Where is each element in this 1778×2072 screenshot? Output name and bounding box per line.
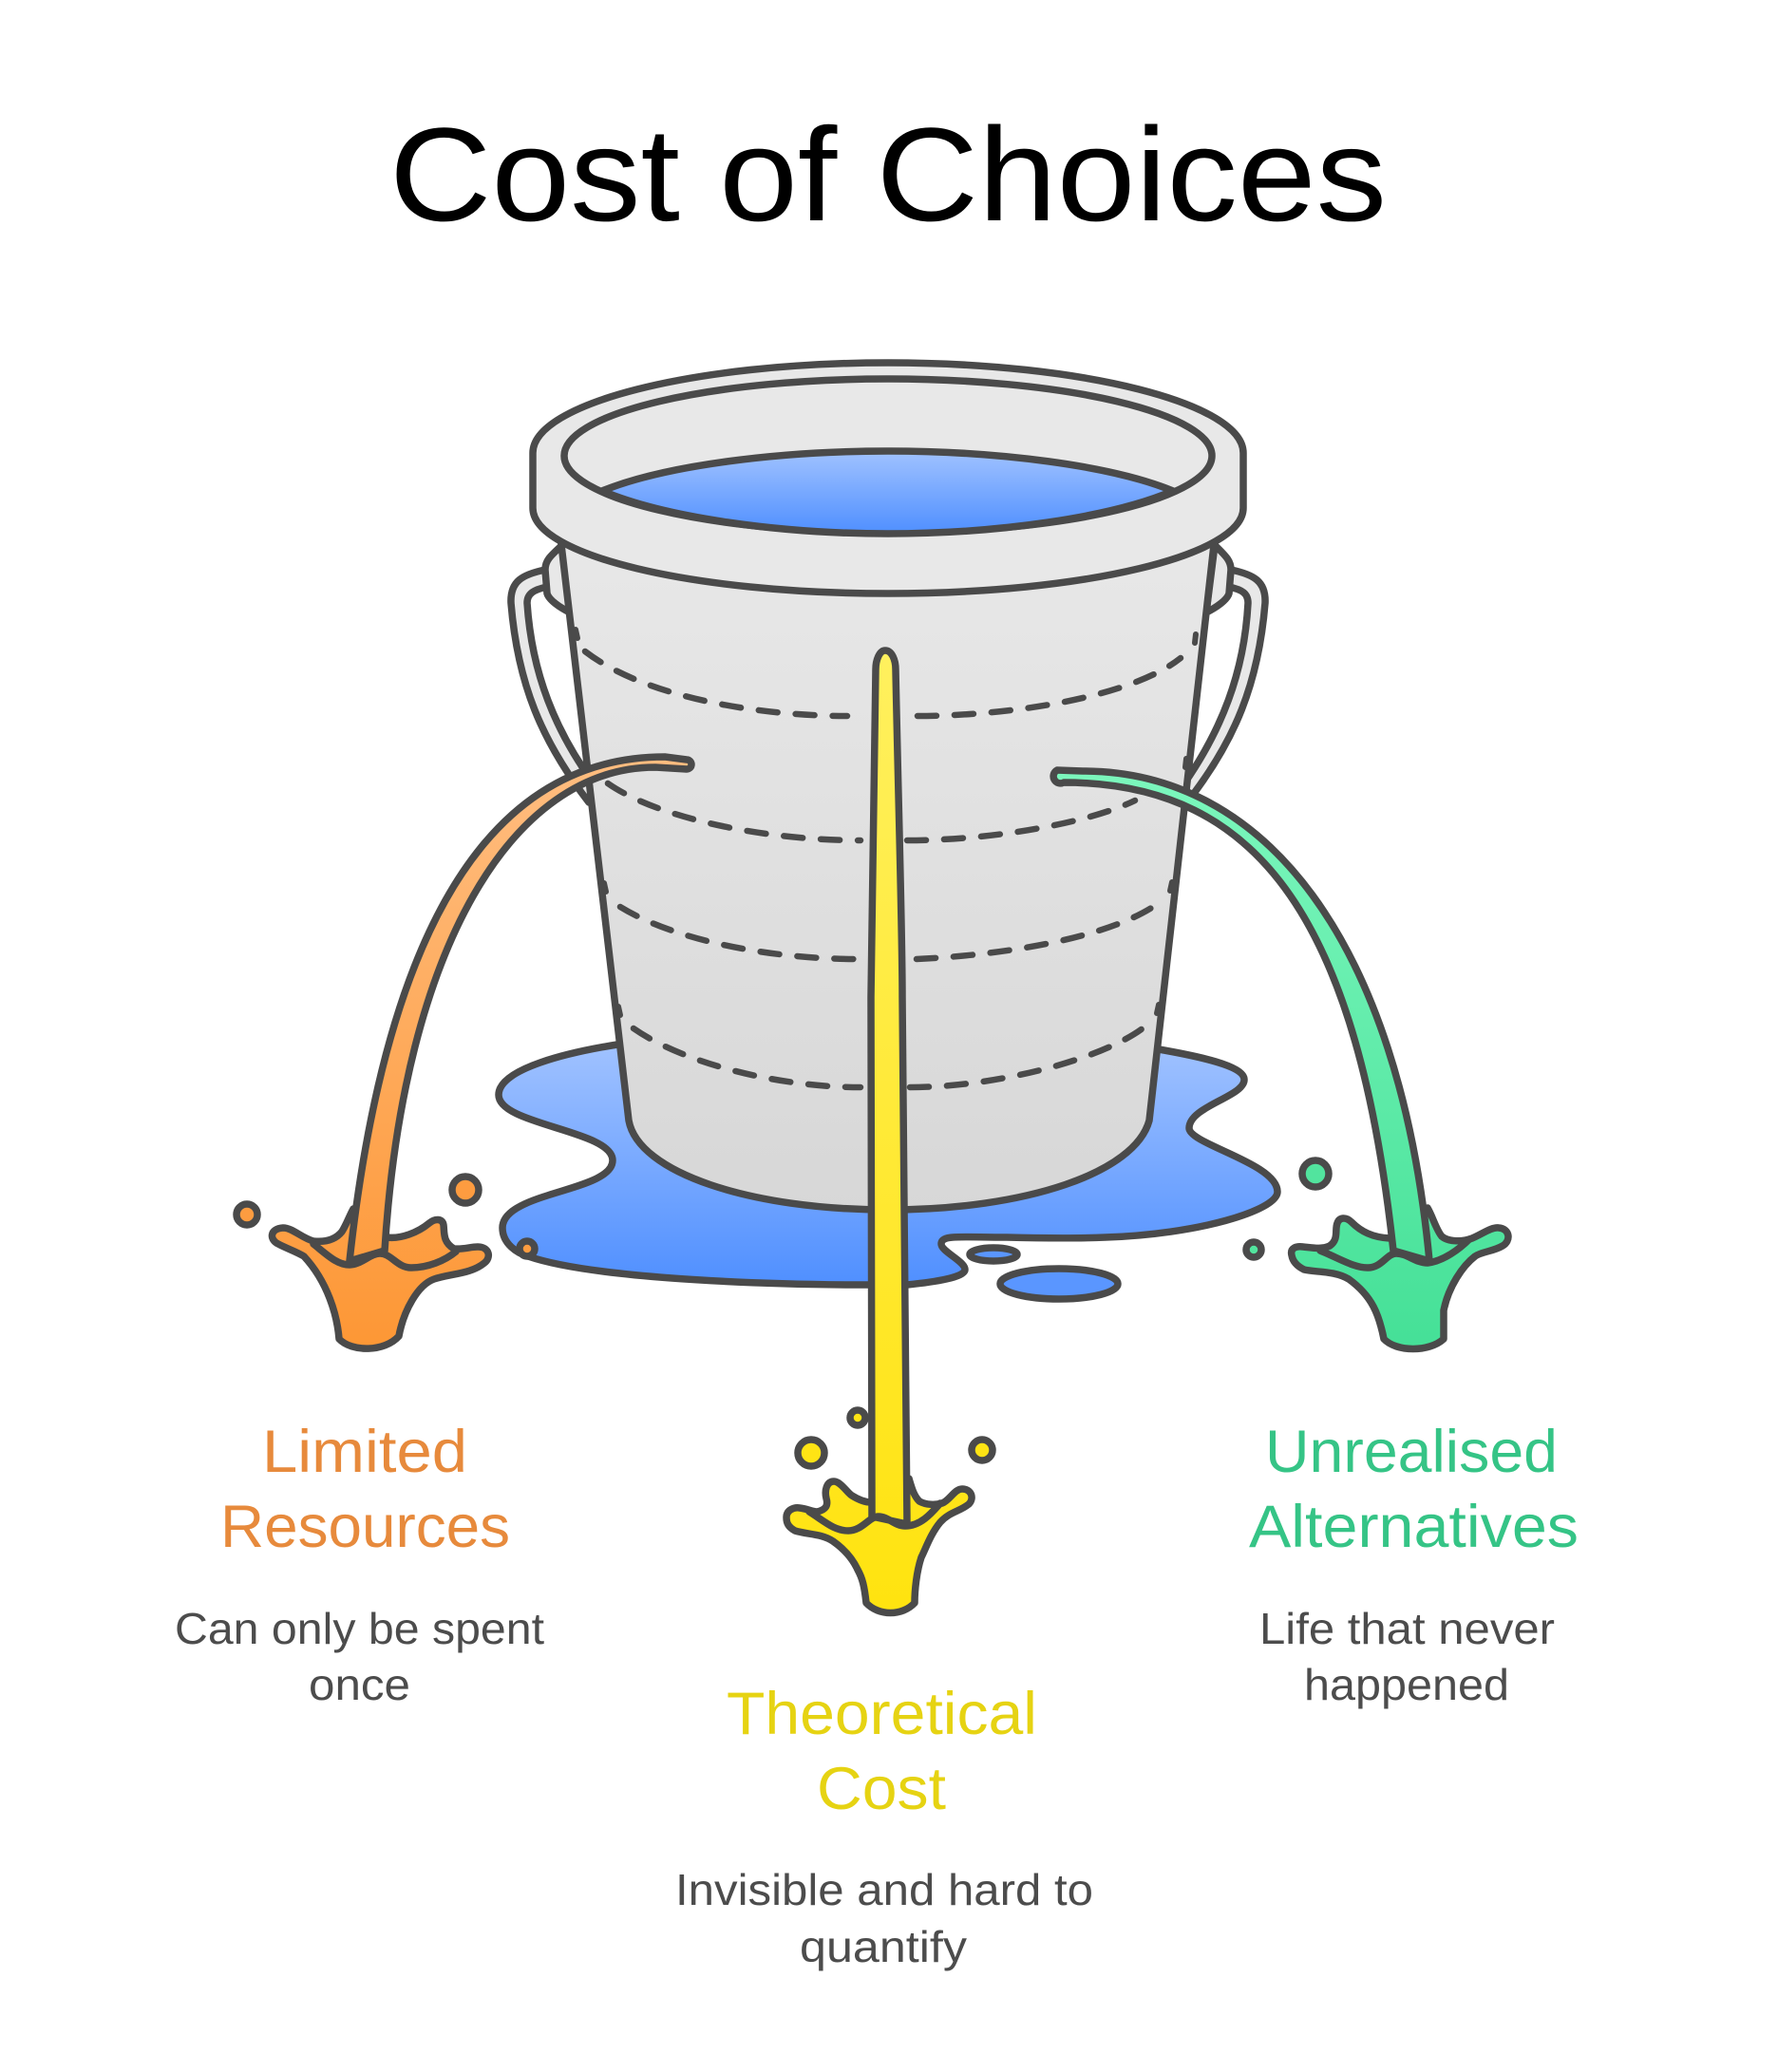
bucket body [560,537,1215,1210]
puddle [499,1045,1277,1299]
bucket handles [511,545,1265,802]
bucket rim [533,363,1243,593]
yellow leak [786,650,993,1612]
heading: limited resources: Limited [262,1419,467,1485]
label: unrealised alternatives [1249,1419,1579,1709]
heading: unrealised alternatives [1249,1419,1579,1560]
heading: limited resources: Resources [220,1494,510,1560]
description: limited resources [175,1604,544,1709]
heading: theoretical cost: Theoretical [727,1681,1037,1747]
label: limited resources [175,1419,544,1709]
heading: limited resources [220,1419,510,1560]
illustration: leaking bucket [499,363,1277,1299]
yellow splash [786,1479,972,1612]
water surface [602,451,1173,534]
yellow droplets [798,1410,993,1466]
green leak [1053,770,1508,1348]
description: limited resources: Can only be spent [175,1604,544,1653]
description: limited resources: once [309,1660,410,1709]
description: unrealised alternatives: Life that never [1259,1604,1555,1653]
orange droplets [236,1177,535,1256]
orange stream [350,757,691,1261]
orange splash [272,1209,488,1348]
green stream [1053,770,1429,1261]
green splash wave [1320,1239,1469,1268]
description: theoretical cost: quantify [800,1922,967,1971]
orange splash wave [313,1244,456,1268]
heading: unrealised alternatives: Unrealised [1265,1419,1558,1485]
orange leak [236,757,691,1348]
heading: theoretical cost: Cost [817,1756,947,1822]
green droplets [1246,1160,1329,1257]
description: theoretical cost [675,1865,1093,1971]
description: theoretical cost: Invisible and hard to [675,1865,1093,1914]
title: Cost of Choices [389,100,1387,249]
description: unrealised alternatives: happened [1304,1660,1509,1709]
green splash [1292,1208,1508,1348]
heading: theoretical cost [727,1681,1037,1822]
label: theoretical cost [675,1681,1093,1971]
yellow stream [871,650,907,1524]
heading: unrealised alternatives: Alternatives [1249,1494,1579,1560]
yellow splash wave [809,1503,940,1531]
dashed water lines [585,651,1181,1087]
description: unrealised alternatives [1259,1604,1555,1709]
bucket edge ticks [576,630,1196,1015]
